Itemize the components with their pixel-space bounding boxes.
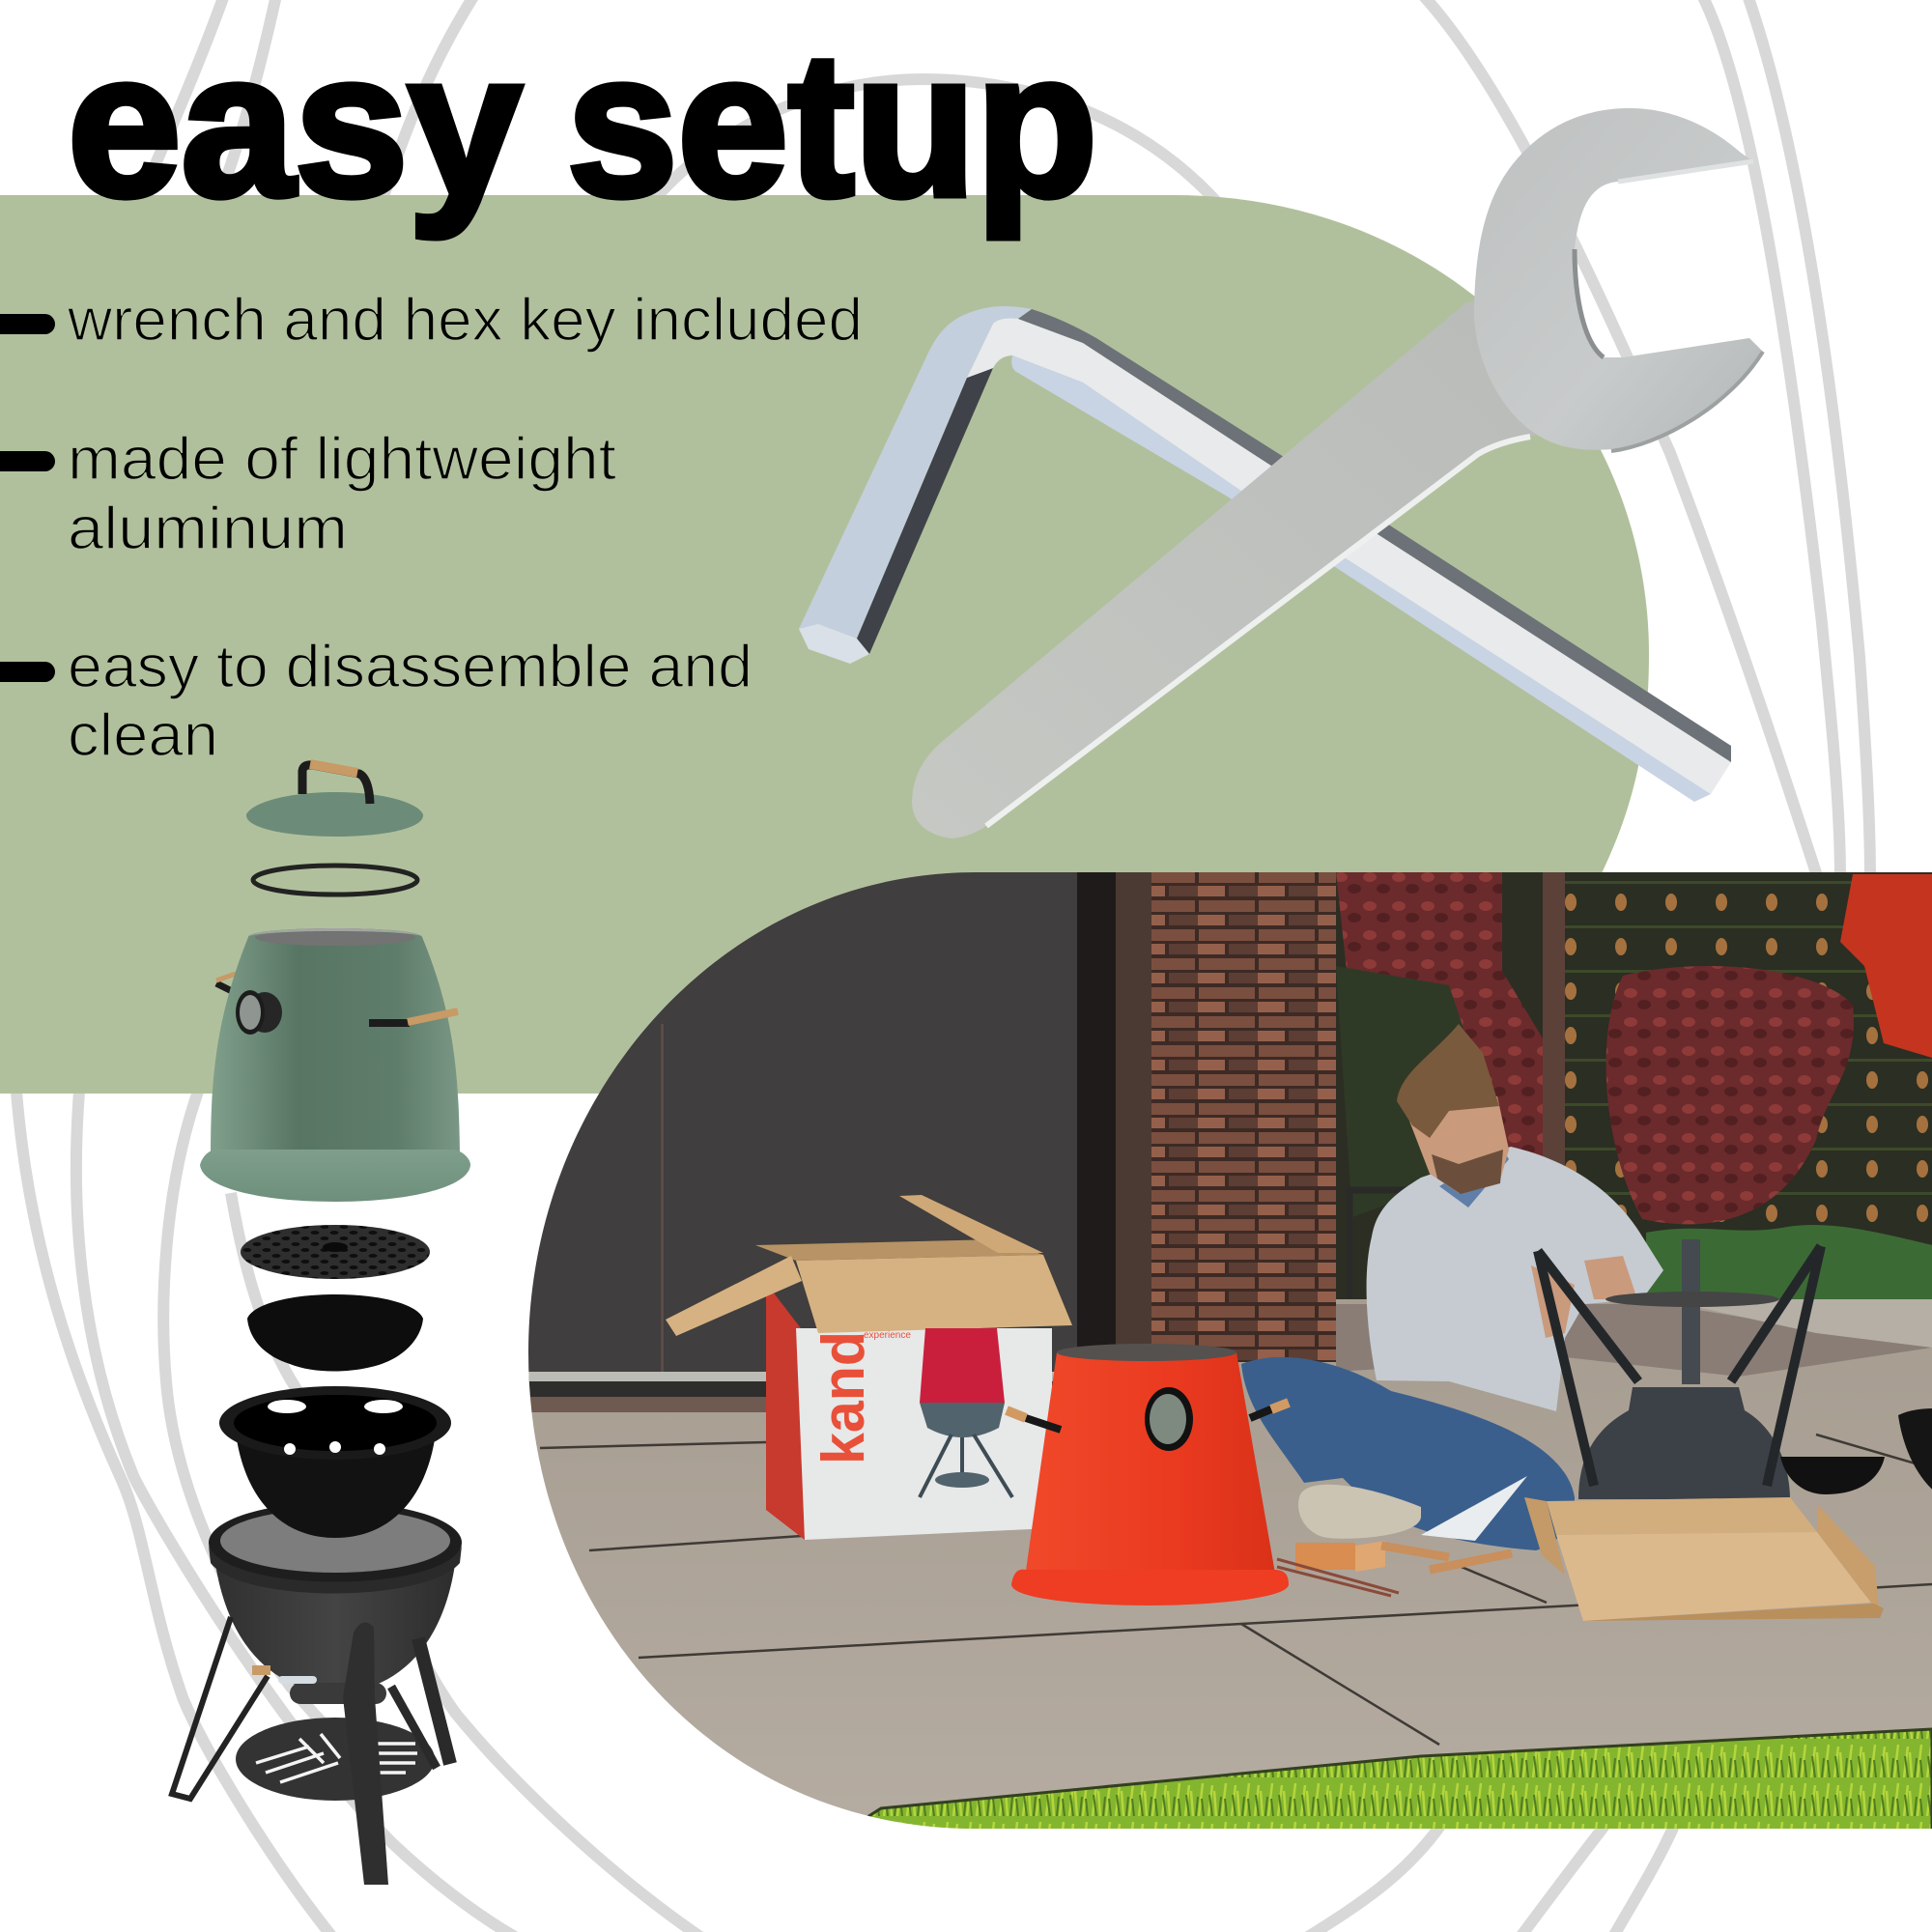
box caption: experience <box>864 1330 911 1341</box>
lid <box>246 764 423 837</box>
green body <box>200 928 470 1202</box>
shirt collar <box>1439 1155 1509 1208</box>
drain tap <box>252 1665 317 1684</box>
shoe <box>1298 1485 1421 1539</box>
icon: wrench <box>912 108 1763 838</box>
beard <box>1432 1150 1503 1194</box>
lower slotted plate <box>236 1718 435 1801</box>
left handle <box>1007 1410 1061 1430</box>
title <box>68 10 1097 239</box>
black bowls <box>1780 1408 1932 1494</box>
cooking grate <box>241 1225 430 1279</box>
pavement <box>522 1299 1932 1835</box>
panel: green backdrop shape <box>0 195 1649 1094</box>
wall base <box>522 1024 1101 1412</box>
gauge <box>1145 1387 1193 1451</box>
bullet 1 marker <box>0 314 55 334</box>
drip bowl <box>247 1294 423 1372</box>
gauge <box>236 990 282 1035</box>
legs <box>172 1617 450 1885</box>
cardboard tray <box>1524 1497 1884 1621</box>
red grill body <box>1007 1344 1289 1605</box>
chair <box>1350 1186 1406 1217</box>
photo background: dark wall <box>522 869 1101 1381</box>
bullet 1 text: wrench and hex key included <box>67 287 863 354</box>
charcoal basket <box>219 1386 451 1538</box>
icon: hex key <box>799 306 1731 802</box>
title: setup <box>567 10 1097 239</box>
box illustration: red grill <box>920 1328 1012 1497</box>
lower bowl <box>209 1502 462 1704</box>
gasket ring <box>253 866 417 895</box>
bullet 3 text <box>68 634 753 769</box>
bullet 2 text <box>68 426 616 562</box>
bullet 2 text: aluminum <box>68 496 348 562</box>
garden wall <box>1336 872 1932 1299</box>
side handle <box>216 974 236 991</box>
hair <box>1397 1024 1499 1138</box>
face <box>1406 1096 1509 1193</box>
man <box>1241 1024 1663 1550</box>
bullet 3 text: easy to disassemble and <box>68 634 753 700</box>
photo: man assembling the grill on a terrace <box>522 869 1932 1840</box>
hands <box>1531 1256 1637 1338</box>
cardboard box <box>666 1195 1072 1540</box>
feature list <box>0 287 863 769</box>
right handle <box>1250 1403 1289 1418</box>
instructions and tools <box>1277 1476 1527 1596</box>
bullet 3 text: clean <box>68 702 218 769</box>
jeans <box>1241 1357 1575 1550</box>
box logo: kand <box>810 1331 877 1464</box>
bullet 2 text: made of lightweight <box>68 426 616 493</box>
title: easy <box>68 10 522 239</box>
upside-down grill <box>1538 1239 1821 1499</box>
pergola post <box>1077 869 1152 1372</box>
grass <box>867 1727 1932 1829</box>
bullet 2 marker <box>0 451 55 471</box>
bullet 3 marker <box>0 662 55 682</box>
brick column <box>1151 872 1336 1365</box>
right handle <box>369 1011 458 1023</box>
sweater <box>1367 1147 1663 1411</box>
exploded grill <box>172 764 470 1885</box>
